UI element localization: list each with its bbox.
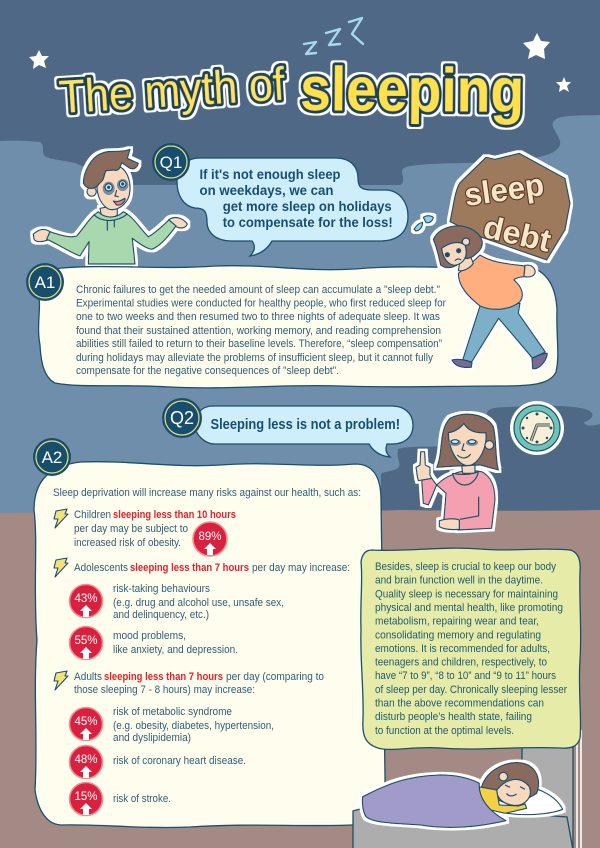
question 1 text: to compensate for the loss! [223,215,393,230]
panel text: and brain function well in the daytime. [375,575,543,587]
panel text: disturb people’s health state, failing [375,711,532,723]
illustration: sleeping girl in bed [353,730,581,848]
answer 1 body text: during holidays may alleviate the problems of insufficient sleep, but it cannot fully [76,352,433,364]
panel text: to function at the optimal levels. [375,725,514,737]
panel text: emotions. It is recommended for adults, [375,643,550,655]
question 2 text: Sleeping less is not a problem! [210,416,400,433]
adolescents risk group: (e.g. drug and alcohol use, unsafe sex, [113,597,284,609]
stars [29,33,571,92]
face [497,779,530,805]
headboard [522,730,573,848]
adults risk group [54,671,324,816]
panel text: physical and mental health, like promoting [375,602,563,614]
children risk group: per day may be subject to [74,523,188,535]
panel text: consolidating memory and regulating [375,629,541,641]
question 2 bubble [162,398,413,457]
adults risk group: Adults [74,671,102,683]
adults risk group: risk of coronary heart disease. [113,755,246,767]
panel text: teenagers and children, respectively, to [375,657,547,669]
answer 1 body text: Chronic failures to get the needed amount of sleep can accumulate a "sleep debt." [76,284,440,296]
answer 1 body text: compensate for the negative consequences of "sleep debt". [76,365,339,377]
Q2 badge: Q2 [170,408,194,428]
sleep z letters [304,18,363,54]
adolescents risk group: like anxiety, and depression. [113,644,238,656]
panel text: metabolism, repairing wear and tear, [375,616,539,628]
panel text: of sleep per day. Chronically sleeping lesser [375,684,567,696]
boulder [450,153,570,260]
children risk group: Children [74,509,111,521]
badge: 45% [70,708,102,740]
A1 badge [26,263,64,301]
panel text: Quality sleep is necessary for maintaining [375,588,558,600]
question 1 text: on weekdays, we can [200,183,334,198]
Q1 badge [152,143,190,181]
panel text: have “7 to 9”, “8 to 10” and “9 to 11” hours [375,670,556,682]
boulder label: debt [480,208,555,259]
icon: lightning bolt [54,509,68,528]
panel text: Besides, sleep is crucial to keep our body [375,561,556,573]
Q1 badge: Q1 [160,153,182,172]
badge: 48%: 48% [74,754,98,766]
panel background [361,548,581,749]
panel: why sleep matters [361,548,581,749]
badge: 89%: 89% [198,531,222,543]
panel: answer 2 [33,438,385,827]
adults risk group: those sleeping 7 - 8 hours) may increase: [74,684,255,696]
boulder label [462,166,555,259]
adolescents risk group: mood problems, [113,630,186,642]
adults risk group: risk of metabolic syndrome [113,706,232,718]
A2 badge: A2 [42,448,62,467]
answer 1 body text: one to two weeks and then resumed two to three nights of adequate sleep. It was [76,311,440,323]
question 1 text [200,167,393,230]
character: woman raising finger [416,414,498,530]
adolescents risk group: sleeping less than 7 hours [130,562,249,574]
title [57,55,524,126]
character: shrugging man [33,149,187,264]
adolescents risk group [54,558,350,660]
answer 1 body text: Experimental studies were conducted for healthy people, who first reduced sleep for [76,298,446,310]
bubble shape [195,406,413,457]
icon: lightning bolt [54,558,68,577]
title word: sleeping: sleeping [300,55,524,126]
adolescents risk group: and delinquency, etc.) [113,609,209,621]
A1 badge: A1 [35,273,55,292]
adolescents risk group: per day may increase: [252,562,350,574]
badge: 43% [70,584,102,618]
question 1 text: If it's not enough sleep [200,167,340,182]
adolescents risk group: risk-taking behaviours [113,583,210,595]
badge: 89% [193,522,227,556]
badge: 55% [70,626,102,660]
panel: answer 1 [26,263,558,388]
answer 1 body text: abilities still failed to return to their baseline levels. Therefore, “sleep compensation” [76,338,442,350]
badge: 55%: 55% [74,635,98,647]
mattress [353,806,573,848]
badge: 43%: 43% [74,593,98,605]
badge: 15%: 15% [74,791,98,803]
adults risk group: risk of stroke. [113,793,171,805]
hair [482,763,539,807]
pillow [507,787,563,815]
character: woman carrying sleep debt boulder [414,153,570,369]
panel text [375,561,567,737]
panel background [34,462,385,827]
adults risk group: per day (comparing to [226,671,324,683]
boulder label: sleep [462,166,546,213]
icon: wall clock [510,401,564,455]
intro text: Sleep deprivation will increase many risks against our health, such as: [53,487,361,499]
badge: 45%: 45% [74,716,98,728]
children risk group: sleeping less than 10 hours [113,509,236,521]
sweat drops [414,216,433,231]
bubble shape [177,158,408,256]
panel background [38,266,558,388]
icon: lightning bolt [54,671,68,690]
answer 1 body text: found that their sustained attention, working memory, and reading comprehension [76,325,441,337]
A2 badge [33,438,71,476]
badge: 48% [70,746,102,778]
adolescents risk group: Adolescents [74,562,128,574]
Q2 badge [162,398,202,438]
badge: 15% [70,782,102,816]
answer 1 body text [76,284,446,377]
title line: The myth of: The myth of [57,57,286,123]
adults risk group: (e.g. obesity, diabetes, hypertension, [113,720,274,732]
adults risk group: and dyslipidemia) [113,732,191,744]
blanket [362,775,506,827]
adults risk group: sleeping less than 7 hours [104,671,223,683]
question 1 bubble [152,143,408,256]
question 1 text: get more sleep on holidays [223,199,392,214]
children risk group: increased risk of obesity. [74,537,181,549]
panel text: than the above recommendations can [375,698,544,710]
children risk group [54,509,236,556]
